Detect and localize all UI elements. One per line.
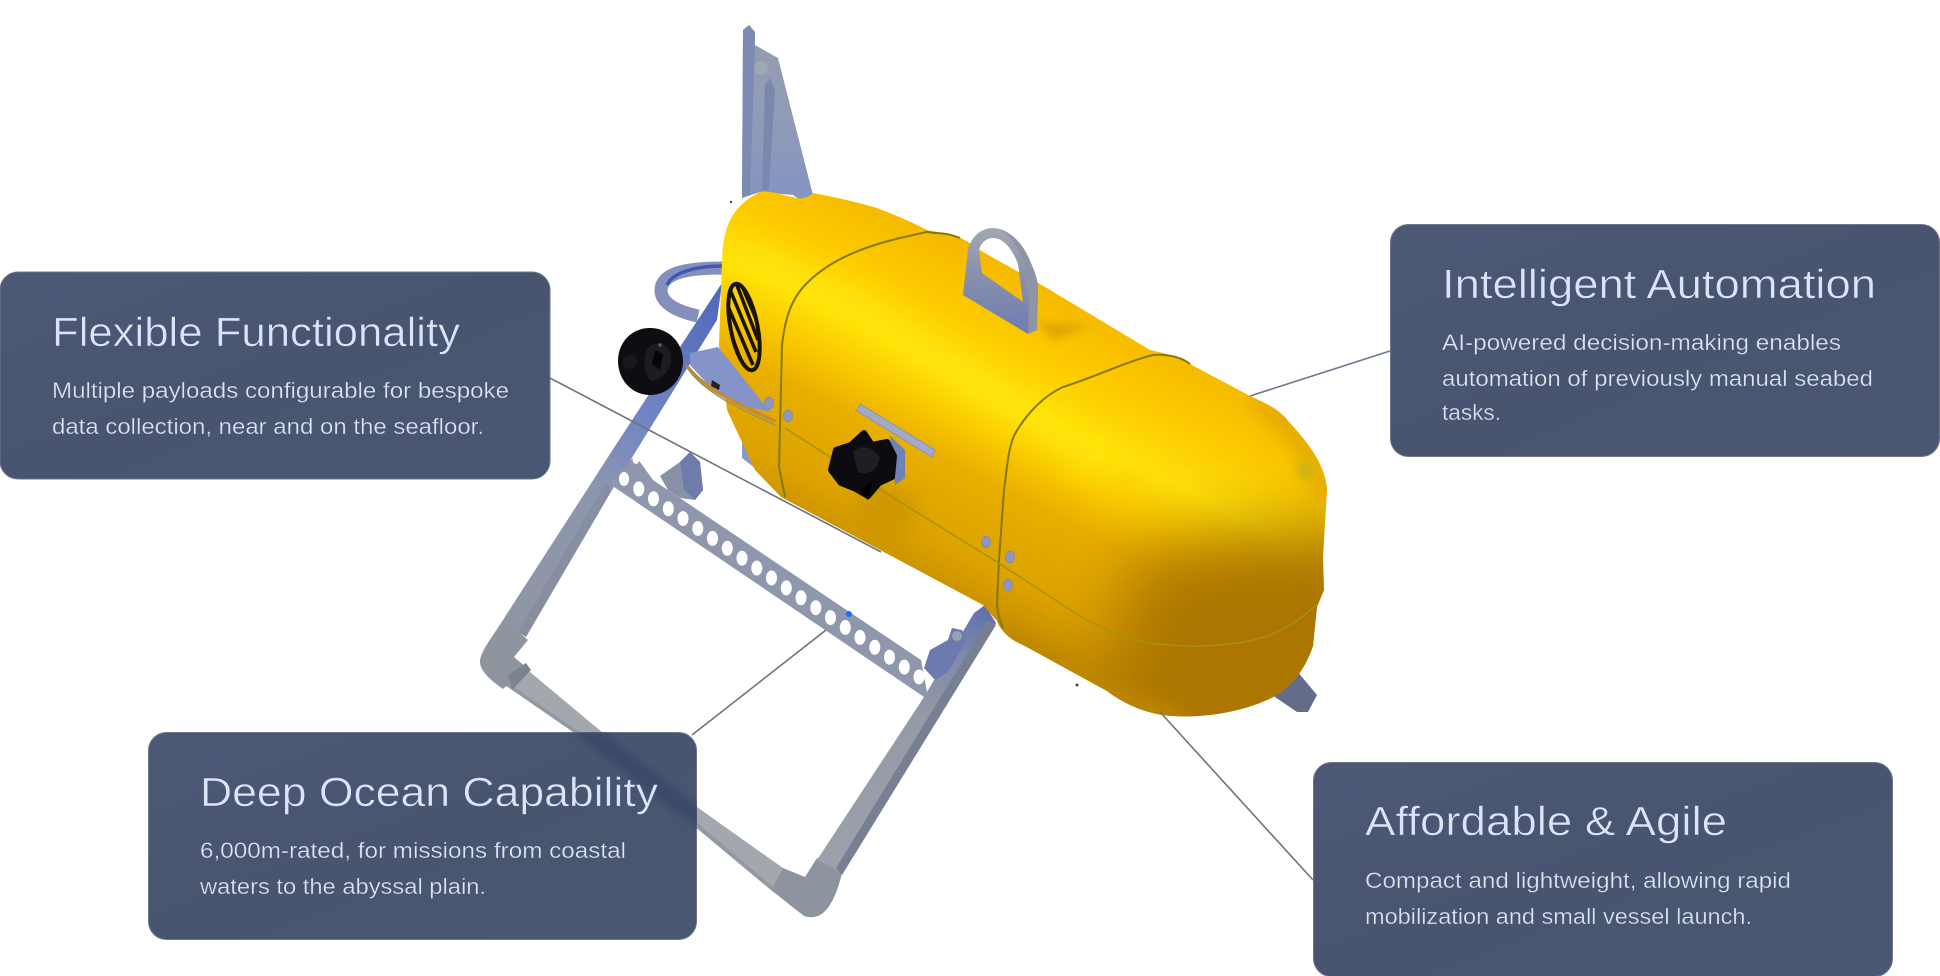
panel: Affordable and Agile [1314, 762, 1892, 976]
hull bolts [764, 397, 1014, 591]
body text: AI-powered decision-making enables [1442, 330, 1841, 355]
panel: Intelligent Automation [1390, 224, 1940, 456]
heading: Flexible Functionality [52, 309, 461, 355]
logo [726, 282, 762, 372]
body text [199, 838, 626, 899]
rear lower fin [1272, 671, 1317, 712]
leader line: Intelligent Automation [1250, 351, 1390, 396]
leader line: Affordable and Agile [1160, 712, 1313, 880]
body text: Multiple payloads configurable for bespoke [52, 378, 509, 403]
leader line: Deep Ocean Capability [692, 630, 826, 735]
body text: 6,000m-rated, for missions from coastal [200, 838, 626, 863]
stray specks [730, 201, 1078, 687]
body text: waters to the abyssal plain. [199, 874, 486, 899]
body text: Compact and lightweight, allowing rapid [1365, 868, 1791, 893]
robot: underwater vehicle [480, 25, 1400, 917]
black thruster knob right [831, 433, 894, 500]
heading: Intelligent Automation [1442, 261, 1876, 307]
body text: data collection, near and on the seafloor. [52, 414, 484, 439]
blue mount plate with cable [687, 347, 775, 425]
hull seams [779, 232, 1317, 646]
body text [1442, 330, 1873, 425]
heading: Deep Ocean Capability [200, 769, 659, 815]
ring handle [661, 266, 722, 316]
lifting handle [963, 228, 1038, 334]
frame corner left [480, 623, 531, 690]
black thruster knob left [618, 328, 683, 395]
body text: tasks. [1442, 400, 1501, 425]
yellow hull [719, 192, 1327, 716]
body text [52, 378, 509, 439]
heading: Affordable & Agile [1365, 798, 1727, 844]
frame corner right [771, 858, 842, 917]
left bracket [660, 452, 703, 500]
leader line: Flexible Functionality [550, 378, 881, 552]
frame bottom arm [505, 667, 783, 890]
body text: automation of previously manual seabed [1442, 366, 1873, 391]
top fin [742, 25, 815, 207]
right bracket [924, 628, 967, 680]
frame left arm [501, 283, 722, 637]
lower stub fin [742, 430, 772, 470]
body text [1365, 868, 1791, 929]
panel: Flexible Functionality [0, 272, 550, 479]
panel: Deep Ocean Capability [148, 732, 700, 940]
body text: mobilization and small vessel launch. [1365, 904, 1752, 929]
perforated crossbar [610, 454, 928, 697]
side bar bracket [857, 404, 935, 485]
frame right arm [817, 605, 996, 875]
frame arm seen through panel [572, 732, 700, 830]
